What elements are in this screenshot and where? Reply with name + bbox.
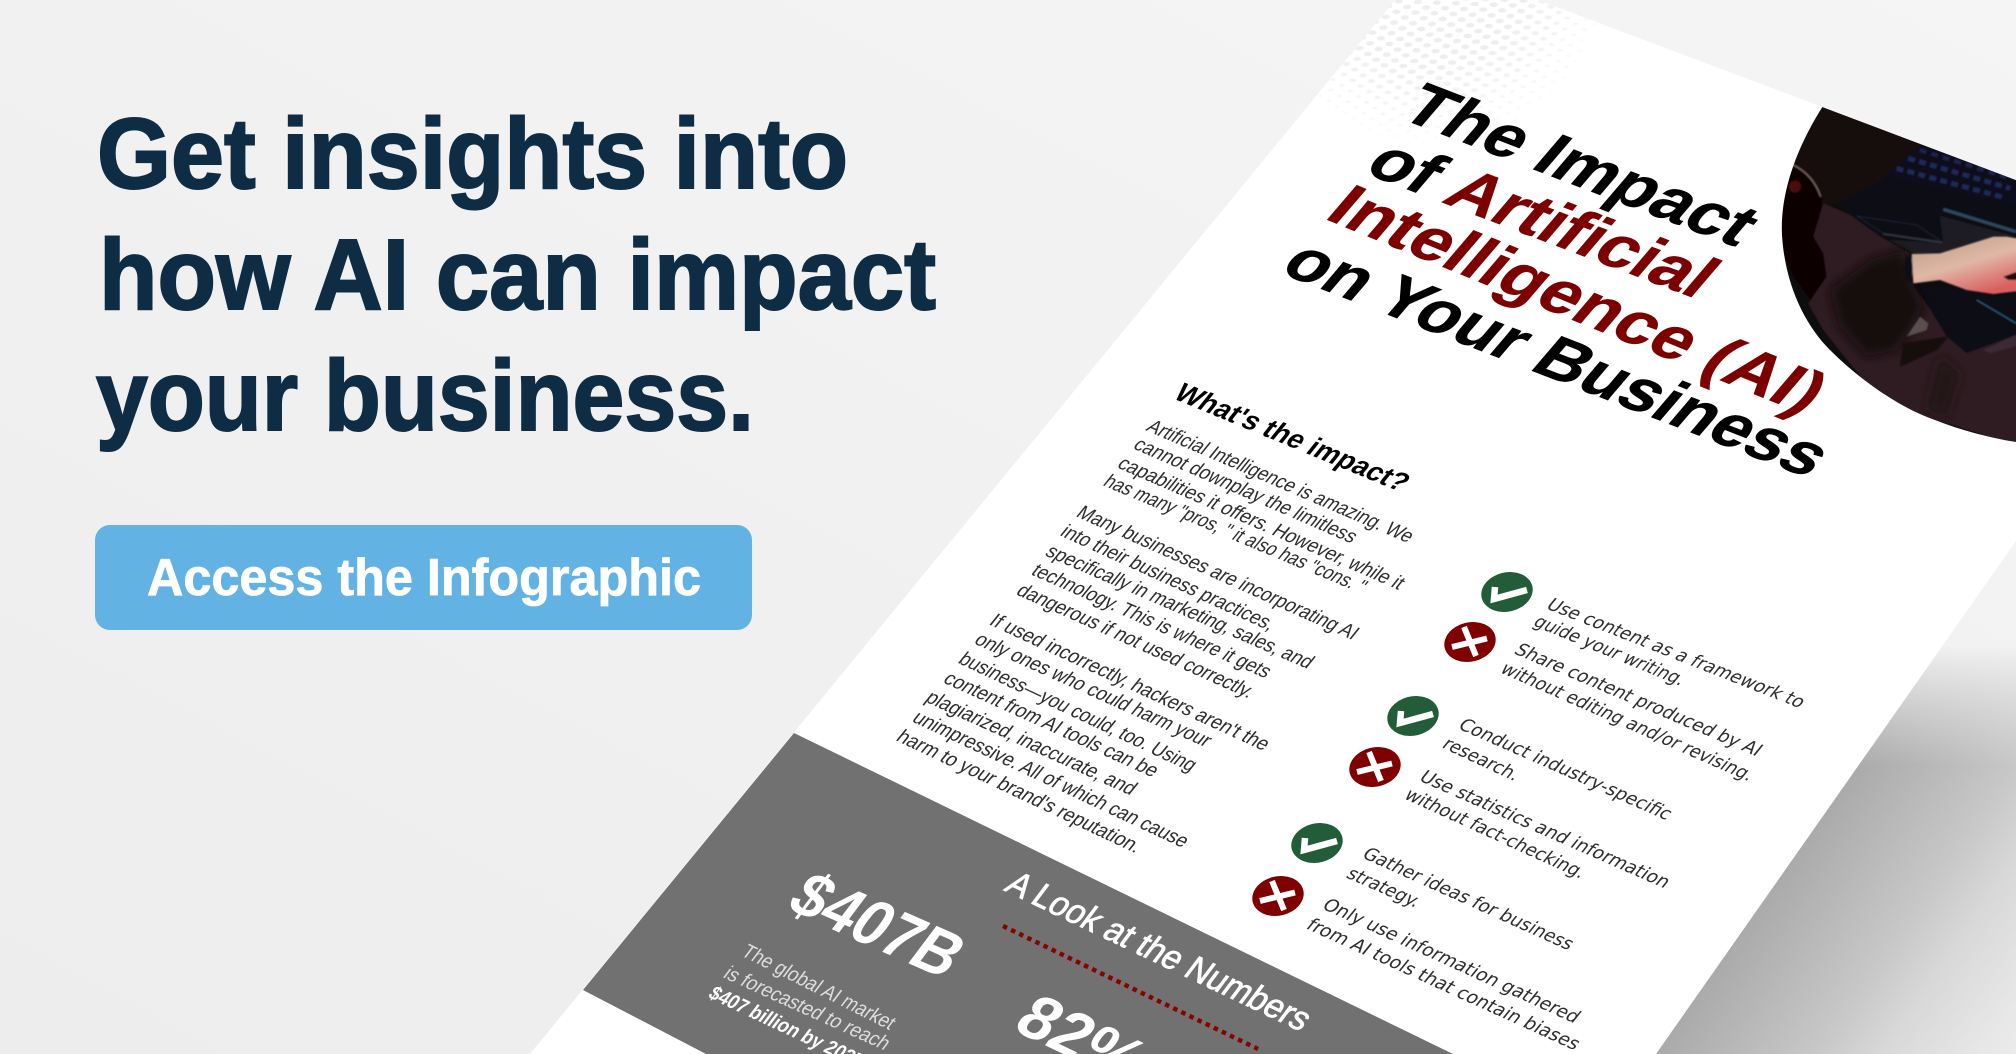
stat: $407B: $407B <box>775 859 981 991</box>
title: on Your Business <box>1269 226 1847 489</box>
tip: do 3: strategy. <box>1342 864 1426 911</box>
tip: don't 2: without fact-checking. <box>1400 785 1591 883</box>
tip: don't 1: without editing and/or revising. <box>1496 659 1759 785</box>
text block: intro paragraphs: dangerous if not used correctly. <box>1012 580 1260 702</box>
title: The Impact <box>1388 71 1775 258</box>
button: access the infographic <box>95 525 752 630</box>
tip: do 1: Use content as a framework to <box>1542 595 1810 712</box>
text block: intro paragraphs: cannot downplay the limitless <box>1129 434 1362 547</box>
tip: do 3: Gather ideas for business <box>1358 844 1579 954</box>
icon: check 3 <box>1281 816 1353 870</box>
tip: do 2: Conduct industry-specific <box>1454 715 1677 824</box>
text block: intro paragraphs: Artificial Intelligence is amazing. We <box>1142 416 1419 547</box>
text block: intro paragraphs: only ones who could harm your <box>970 629 1217 751</box>
page shadow <box>1656 658 2016 1054</box>
icon: cross 1 <box>1434 615 1506 669</box>
headline: how AI can impact <box>99 219 936 331</box>
text block: intro paragraphs <box>892 416 1419 857</box>
title: Intelligence (AI) <box>1314 172 1844 425</box>
text block: intro paragraphs: into their business practices, <box>1056 521 1280 635</box>
text block: intro paragraphs: specifically in marketing, sales, and <box>1041 541 1319 673</box>
text block: intro paragraphs: If used incorrectly, hackers aren't the <box>985 610 1275 755</box>
tip: do 2: research. <box>1438 734 1525 785</box>
stat description: global AI market: The global AI market <box>737 941 900 1034</box>
text block: intro paragraphs: business—you could, too. Using <box>954 649 1202 776</box>
button: access the infographic: Access the Infographic <box>147 549 701 607</box>
headline <box>96 98 936 452</box>
heading: a look at the numbers: A Look at the Numbers <box>998 864 1320 1038</box>
text block: intro paragraphs: content from AI tools can be <box>939 668 1164 781</box>
text block: intro paragraphs: unimpressive. All of which can cause <box>908 707 1194 852</box>
text block: intro paragraphs: harm to your brand's reputation. <box>892 726 1147 857</box>
text block: intro paragraphs: plagiarized, inaccurate, and <box>921 687 1142 799</box>
heading: what's the impact: What's the impact? <box>1168 379 1416 498</box>
tip: do 1: guide your writing. <box>1529 612 1691 690</box>
dotted divider <box>1003 926 1258 1049</box>
text block: intro paragraphs: has many "pros, " it also has "cons. " <box>1099 471 1372 597</box>
icon: check 1 <box>1471 565 1543 619</box>
headline: Get insights into <box>97 98 848 210</box>
tip: don't 1: Share content produced by AI <box>1510 640 1767 760</box>
infographic page sheet <box>530 0 2016 1054</box>
headline: your business. <box>96 340 754 452</box>
icon: check 2 <box>1377 689 1449 743</box>
icon: cross 3 <box>1242 869 1314 923</box>
title: of Artificial <box>1353 126 1735 309</box>
text block: intro paragraphs: capabilities it offers. However, while it <box>1113 453 1410 594</box>
panel: a look at the numbers <box>583 733 1453 1054</box>
text block: intro paragraphs: technology. This is where it gets <box>1027 560 1276 682</box>
text block: intro paragraphs: Many businesses are incorporating AI <box>1072 502 1364 644</box>
photo: hands on laptop in circle <box>1782 107 2016 442</box>
tip: don't 3: Only use information gathered <box>1318 895 1585 1027</box>
tip: don't 2: Use statistics and information <box>1415 767 1675 892</box>
icon: cross 2 <box>1339 740 1411 794</box>
halftone dots <box>1332 0 1570 116</box>
title <box>1269 71 1847 489</box>
